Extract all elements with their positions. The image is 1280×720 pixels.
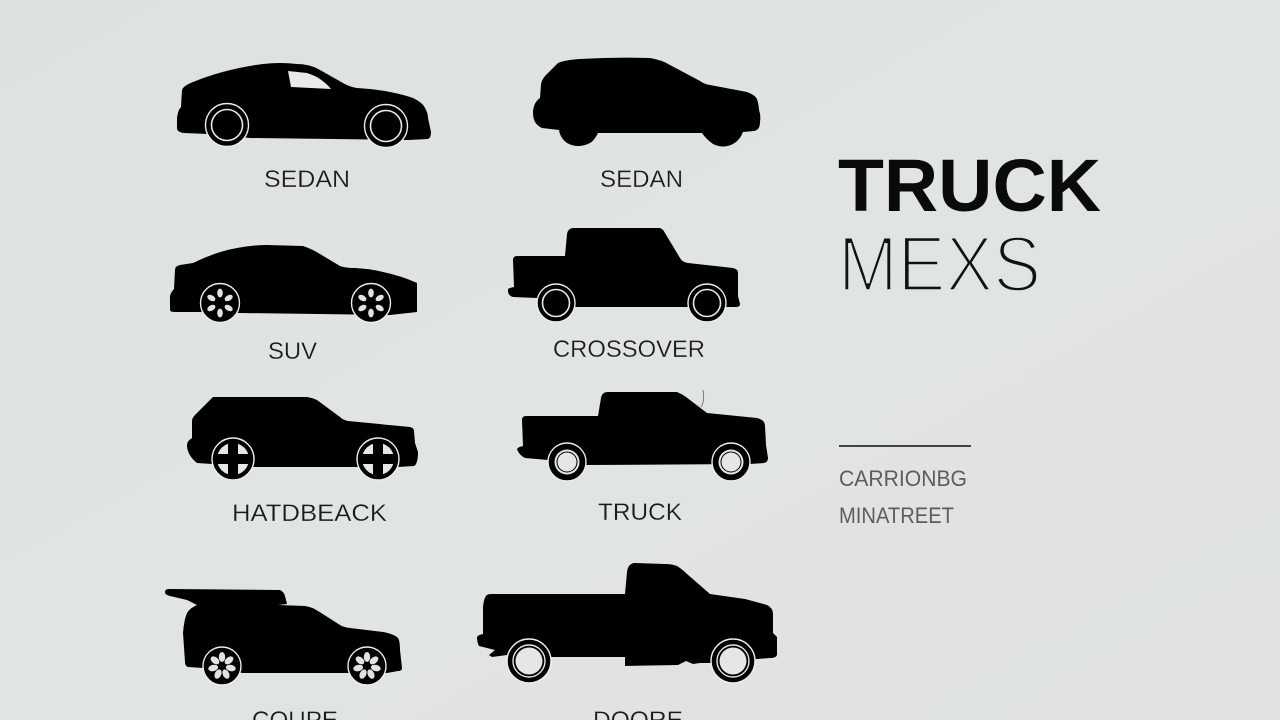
car body silhouette [170,245,417,315]
car window [288,71,331,89]
rear spoked wheel [200,284,240,322]
front wheel [688,284,726,322]
rear cross wheel [212,438,254,480]
vehicle: hatchback [187,397,418,527]
label: HATDBEACK [232,500,387,527]
label: TRUCK [598,499,682,526]
car body silhouette [187,397,418,467]
side note [839,445,971,528]
label: CROSSOVER [553,336,705,363]
antenna line [701,390,704,407]
car body silhouette [165,589,402,673]
car body silhouette [517,392,768,465]
front spoked wheel [348,647,386,685]
vehicle: sedan top left [177,63,431,193]
front wheel [364,104,408,148]
note line 1: CARRIONBG [839,466,967,491]
title [838,144,1101,308]
front cross wheel [357,438,399,480]
front spoked wheel [352,284,390,322]
car body silhouette [477,563,777,666]
front wheel [712,443,750,481]
label: SEDAN [600,166,683,193]
title thin line: MEXS [838,219,1041,308]
vehicle: suv [170,245,417,365]
title bold line: TRUCK [838,144,1101,227]
rear wheel [507,639,551,683]
label: SEDAN [264,166,350,193]
car body silhouette [508,228,740,307]
label: SUV [268,338,317,365]
rear spoked wheel [203,647,241,685]
vehicle: second sedan top right [533,58,760,193]
front wheel [711,639,755,683]
vehicle: coupe with roof carrier [165,589,402,720]
vehicle: crossover [508,228,740,363]
vehicle: large pickup [477,563,777,720]
rear wheel [206,104,248,146]
rear wheel [537,284,575,322]
vehicle: pickup truck [517,390,768,526]
rear wheel [548,443,586,481]
note line 2: MINATREET [839,503,954,528]
car body silhouette [533,58,760,146]
car body silhouette [177,63,431,140]
rule [839,445,971,447]
